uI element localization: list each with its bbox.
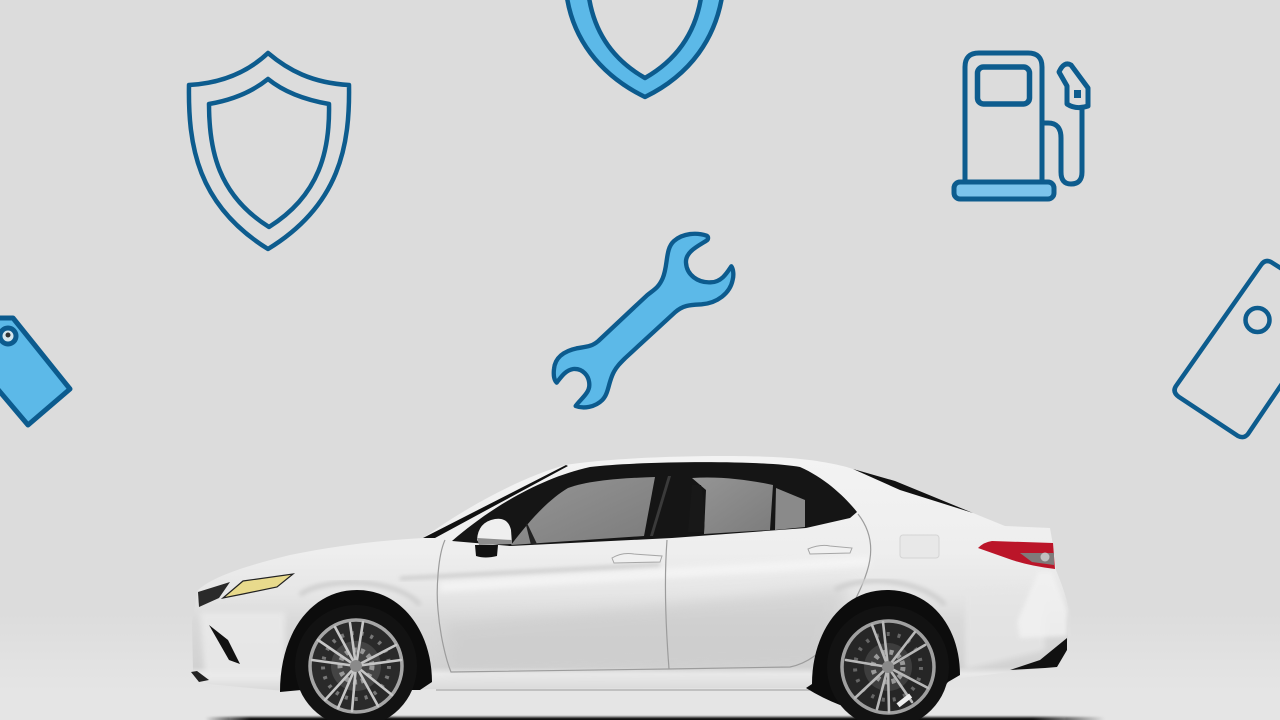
pump base <box>954 182 1054 199</box>
door lines <box>436 514 871 690</box>
window frame <box>452 462 857 546</box>
front arch lip <box>300 583 420 605</box>
rear small glass <box>775 488 805 530</box>
front vent <box>209 625 240 664</box>
rear door glass <box>692 477 773 534</box>
front wheel arch <box>280 590 432 692</box>
front seat silhouette <box>688 485 705 532</box>
tail light <box>978 541 1055 569</box>
rear lower bumper <box>1010 638 1067 670</box>
rear window strip <box>853 469 973 513</box>
front door handle <box>612 554 662 563</box>
icon: blue shield cropped at top <box>566 0 723 97</box>
icon: fuel pump <box>954 53 1088 199</box>
rear wheel <box>827 606 949 720</box>
car body shading <box>200 556 1067 680</box>
rear wheel arch <box>806 590 960 705</box>
steering detail <box>526 523 537 545</box>
mirror <box>475 519 512 558</box>
rear bumper facet <box>1017 572 1067 638</box>
front lip <box>191 671 209 682</box>
headlight <box>223 574 293 598</box>
ground shadow <box>205 717 1105 720</box>
front wheel <box>295 605 417 720</box>
icon: outlined tag cropped at right <box>1175 261 1280 437</box>
pillar highlight <box>650 476 671 536</box>
car body <box>192 456 1069 691</box>
pump nozzle <box>1059 64 1088 108</box>
car <box>191 456 1069 720</box>
icon: outlined shield <box>189 53 349 249</box>
fuel door <box>900 535 939 558</box>
rear arch lip <box>835 581 945 605</box>
pump screen <box>978 67 1030 104</box>
icon: wrench <box>554 234 733 407</box>
icon: blue price tag cropped at left <box>0 318 70 425</box>
pump hose <box>1043 106 1082 184</box>
pump body <box>965 53 1042 182</box>
headlight housing <box>198 582 230 607</box>
front door glass <box>511 477 655 545</box>
windshield strip <box>423 465 568 538</box>
rear door handle <box>808 545 852 554</box>
